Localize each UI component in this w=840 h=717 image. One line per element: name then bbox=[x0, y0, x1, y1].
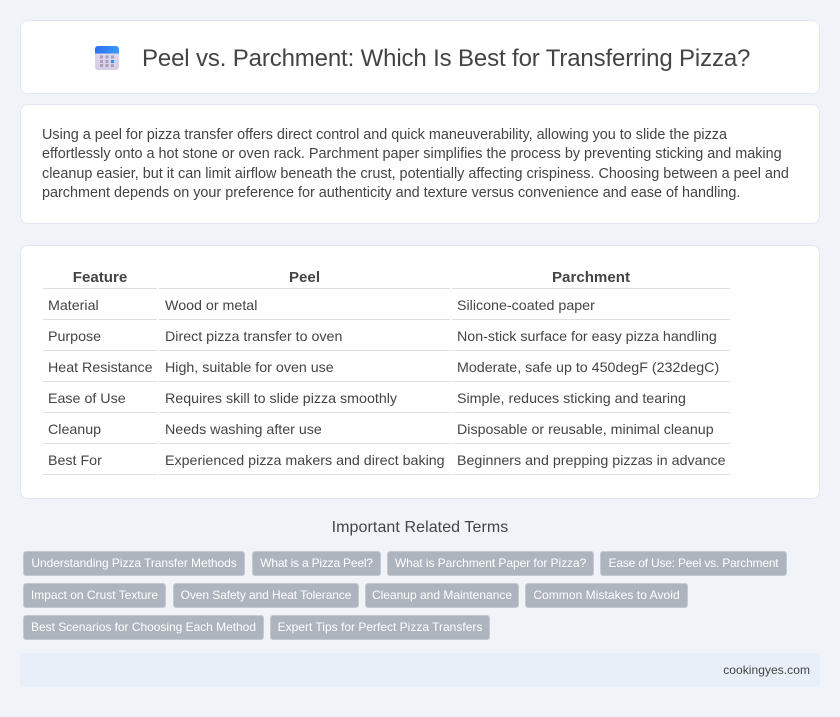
comparison table: Purpose bbox=[48, 329, 101, 345]
table header bbox=[73, 269, 630, 286]
related terms tags: Expert Tips for Perfect Pizza Transfers bbox=[278, 620, 482, 634]
summary card bbox=[20, 104, 820, 224]
table header: Peel bbox=[289, 269, 320, 286]
related terms tags: What is Parchment Paper for Pizza? bbox=[395, 556, 586, 570]
related terms tags bbox=[23, 551, 787, 640]
comparison table bbox=[43, 269, 730, 475]
comparison table: Direct pizza transfer to oven bbox=[165, 329, 342, 345]
comparison table: Non-stick surface for easy pizza handling bbox=[457, 329, 717, 345]
summary text: cleanup easier, but it can limit airflow beneath the crust, potentially affecting crispiness. Choosing between a peel and bbox=[42, 166, 789, 182]
comparison table: Wood or metal bbox=[165, 298, 257, 314]
related terms tags: Understanding Pizza Transfer Methods bbox=[31, 556, 237, 570]
table header: Feature bbox=[73, 269, 127, 286]
related terms heading: Important Related Terms bbox=[332, 519, 508, 536]
table card bbox=[20, 245, 820, 499]
related terms tags: Impact on Crust Texture bbox=[31, 588, 158, 602]
related terms tags: Cleanup and Maintenance bbox=[372, 588, 512, 602]
title: Peel vs. Parchment: Which Is Best for Transferring Pizza? bbox=[142, 45, 750, 72]
comparison table: Silicone-coated paper bbox=[457, 298, 595, 314]
summary text: parchment depends on your preference for authenticity and texture versus convenience and ease of handling. bbox=[42, 185, 740, 201]
footer credit: cookingyes.com bbox=[723, 663, 810, 677]
comparison table: Requires skill to slide pizza smoothly bbox=[165, 391, 397, 407]
comparison table: Disposable or reusable, minimal cleanup bbox=[457, 422, 714, 438]
comparison table: Ease of Use bbox=[48, 391, 126, 407]
comparison table: Experienced pizza makers and direct baking bbox=[165, 453, 445, 469]
comparison table: Material bbox=[48, 298, 99, 314]
icon: calendar bbox=[95, 46, 119, 70]
comparison table: Needs washing after use bbox=[165, 422, 322, 438]
related terms tags: Ease of Use: Peel vs. Parchment bbox=[609, 556, 778, 570]
comparison table: High, suitable for oven use bbox=[165, 360, 334, 376]
header card bbox=[20, 20, 820, 94]
comparison table: Beginners and prepping pizzas in advance bbox=[457, 453, 726, 469]
table header: Parchment bbox=[552, 269, 630, 286]
related terms tags: Best Scenarios for Choosing Each Method bbox=[31, 620, 256, 634]
comparison table: Cleanup bbox=[48, 422, 101, 438]
comparison table: Best For bbox=[48, 453, 102, 469]
summary text: effortlessly onto a hot stone or oven rack. Parchment paper simplifies the process by preventing sticking and making bbox=[42, 146, 782, 162]
footer bar bbox=[20, 653, 820, 687]
summary text: Using a peel for pizza transfer offers direct control and quick maneuverability, allowing you to slide the pizza bbox=[42, 127, 727, 143]
comparison table: Moderate, safe up to 450degF (232degC) bbox=[457, 360, 719, 376]
related terms tags: Common Mistakes to Avoid bbox=[533, 588, 680, 602]
summary text bbox=[42, 127, 789, 201]
related terms tags: Oven Safety and Heat Tolerance bbox=[181, 588, 351, 602]
comparison table: Heat Resistance bbox=[48, 360, 153, 376]
comparison table: Simple, reduces sticking and tearing bbox=[457, 391, 686, 407]
related terms tags: What is a Pizza Peel? bbox=[260, 556, 373, 570]
